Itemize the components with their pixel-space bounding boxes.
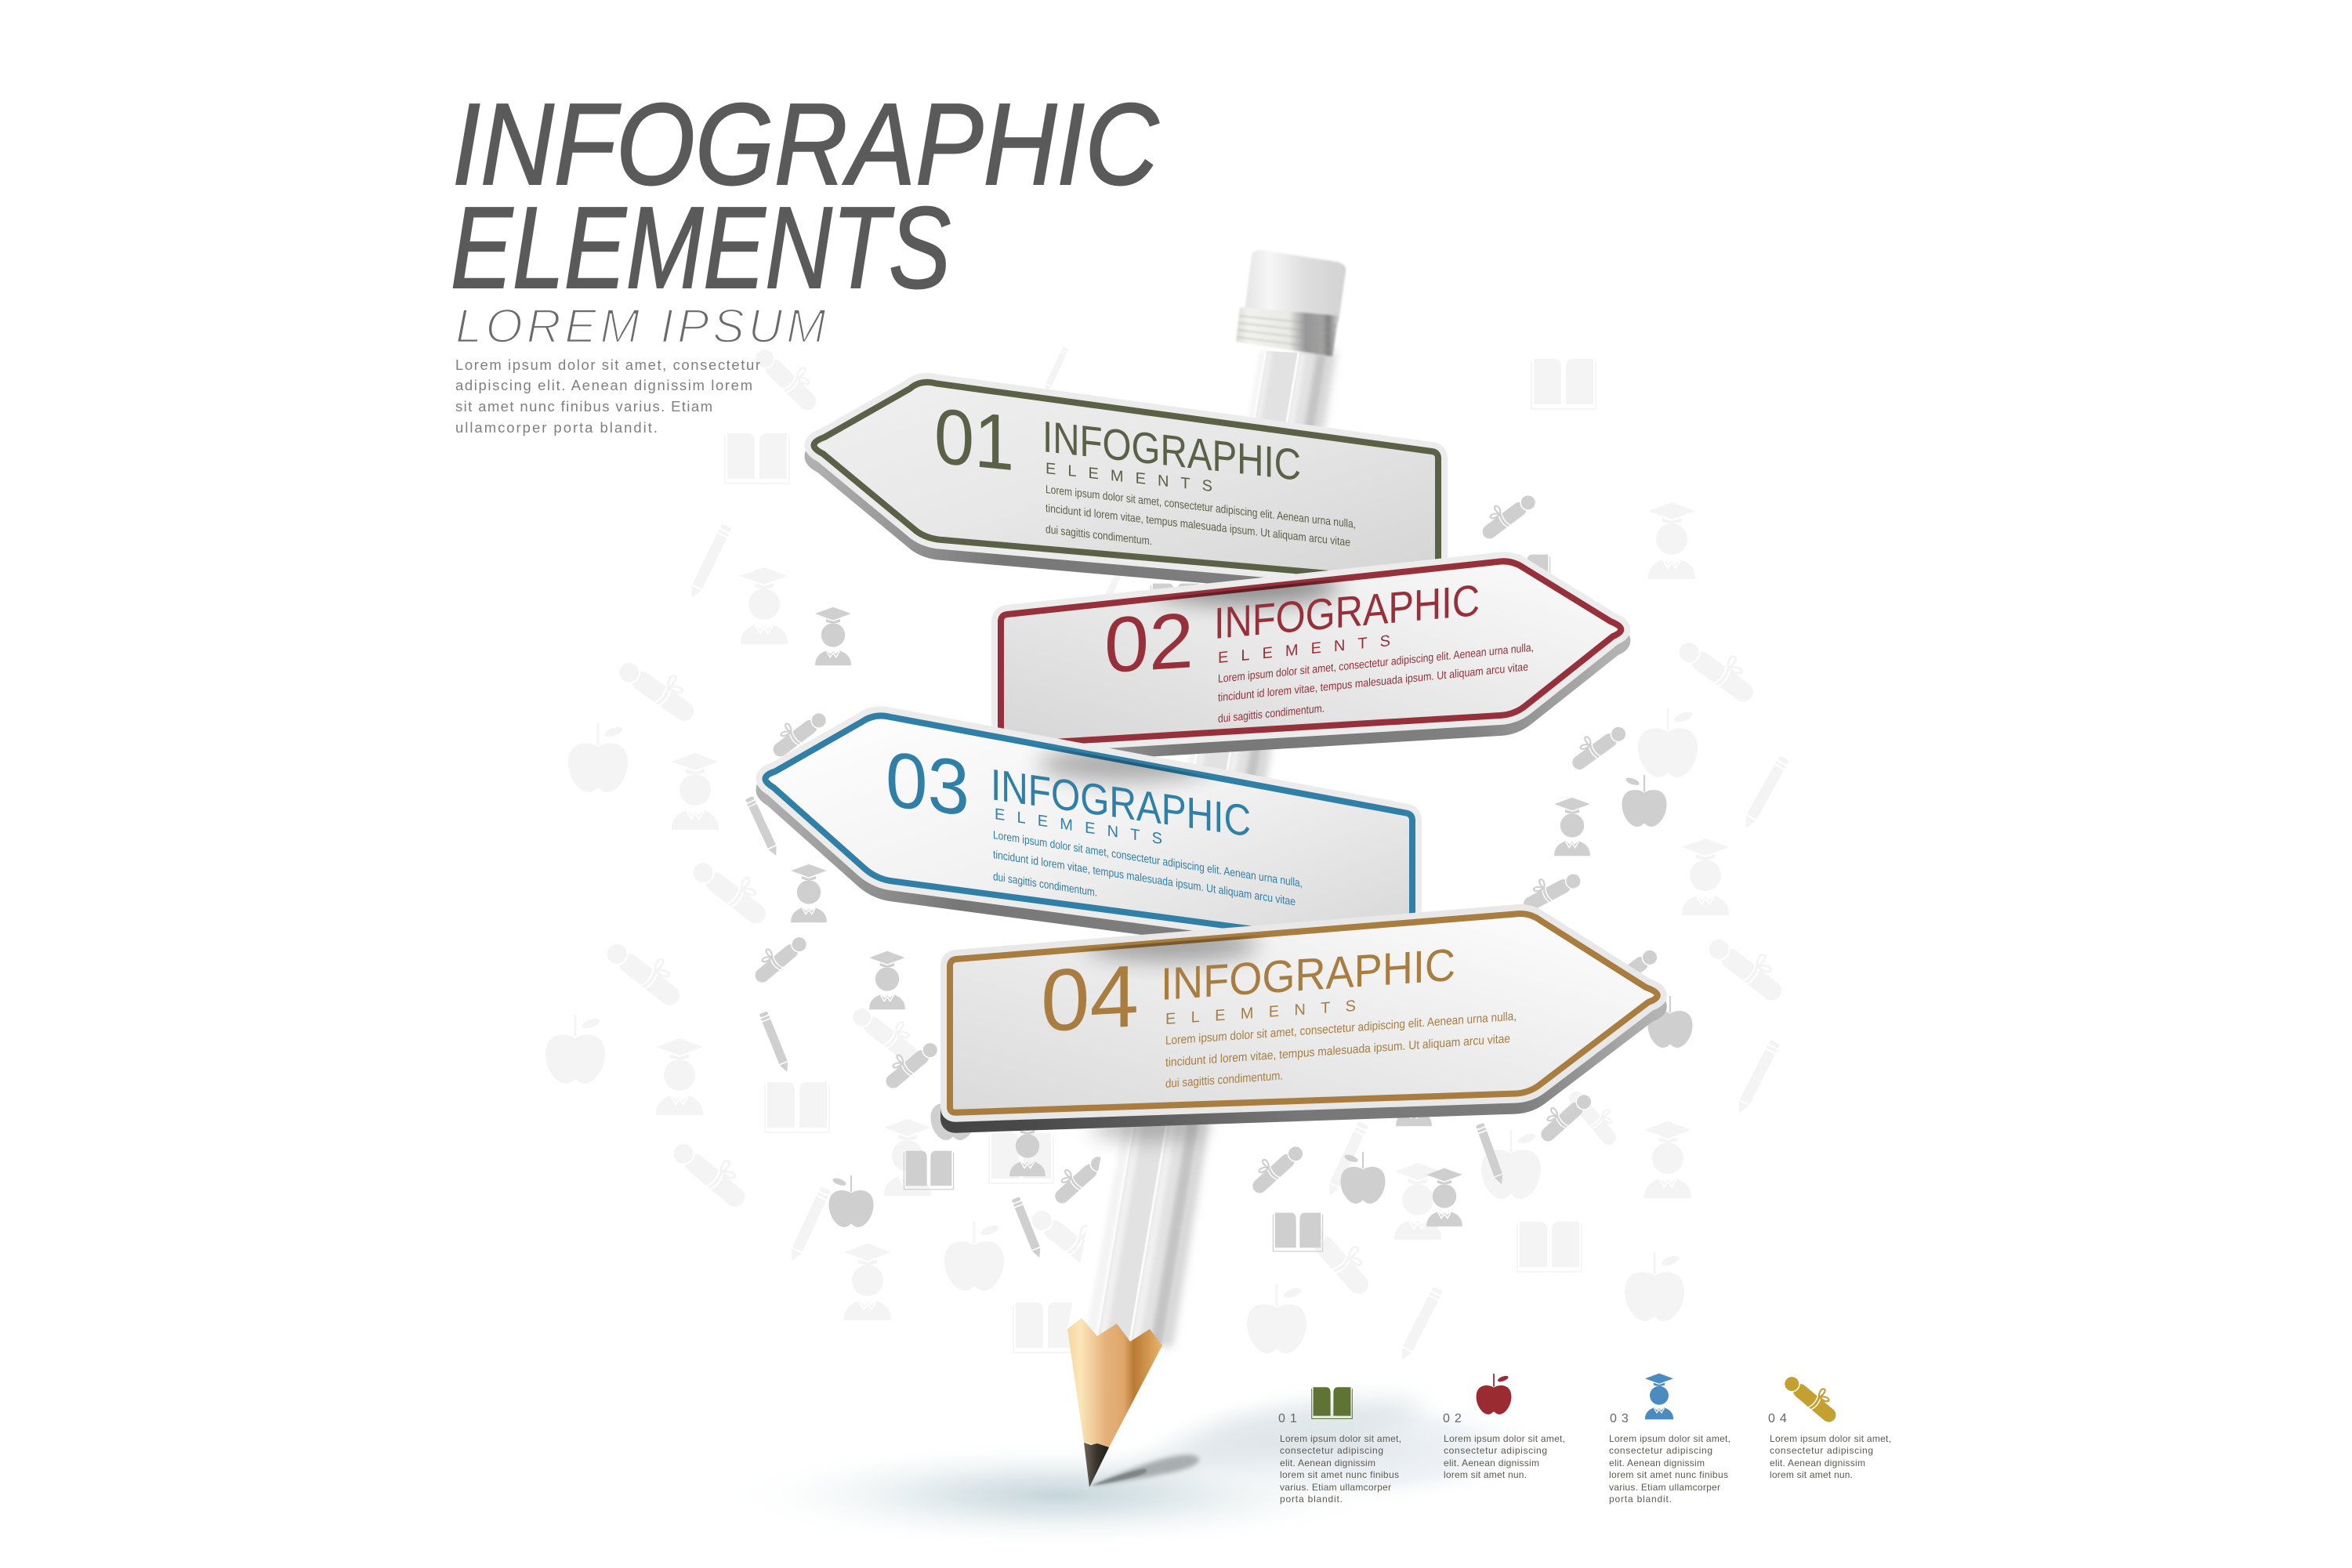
legend item 02: elit. Aenean dignissim	[1444, 1458, 1539, 1468]
legend item 03: Lorem ipsum dolor sit amet,	[1609, 1433, 1730, 1444]
pencil body	[1067, 349, 1335, 1348]
sign 3 subheading: ELEMENTS	[995, 806, 1162, 848]
legend item 02: consectetur adipiscing	[1444, 1445, 1547, 1456]
legend item 02: 02	[1443, 1412, 1466, 1425]
pencil wood tip	[1067, 1318, 1162, 1447]
legend item 01: varius. Etiam ullamcorper	[1280, 1482, 1391, 1493]
sign 4 body text: Lorem ipsum dolor sit amet, consectetur adipiscing elit. Aenean urna nulla,	[1165, 1010, 1517, 1048]
sign 2 heading: INFOGRAPHIC	[1214, 575, 1480, 648]
legend item 04: consectetur adipiscing	[1770, 1445, 1873, 1456]
legend item 02: Lorem ipsum dolor sit amet,	[1444, 1433, 1565, 1444]
sign 4 heading: INFOGRAPHIC	[1161, 940, 1455, 1010]
sign 2 number: 02	[1104, 596, 1194, 690]
subtitle: LOREM IPSUM	[455, 299, 826, 353]
sign 3 heading: INFOGRAPHIC	[991, 759, 1251, 846]
legend item 03	[1609, 1374, 1730, 1505]
sign 1 body text: Lorem ipsum dolor sit amet, consectetur adipiscing elit. Aenean urna nulla,	[1046, 483, 1356, 531]
intro paragraph: ullamcorper porta blandit.	[455, 419, 658, 436]
sign 3: blue arrow	[765, 715, 1412, 961]
sign 1 number: 01	[934, 392, 1014, 487]
legend item 02	[1443, 1374, 1565, 1480]
intro paragraph: adipiscing elit. Aenean dignissim lorem	[455, 377, 752, 393]
pencil	[1067, 250, 1346, 1487]
title: ELEMENTS	[451, 183, 951, 313]
sign 1 body text: dui sagittis condimentum.	[1046, 523, 1152, 548]
legend item 03: 03	[1610, 1412, 1633, 1425]
legend item 01: elit. Aenean dignissim	[1280, 1458, 1375, 1468]
legend item 03: lorem sit amet nunc finibus	[1609, 1469, 1728, 1480]
sign 3 body text: Lorem ipsum dolor sit amet, consectetur adipiscing elit. Aenean urna nulla,	[993, 829, 1303, 890]
sign 4 body text: tincidunt id lorem vitae, tempus malesuada ipsum. Ut aliquam arcu vitae	[1165, 1032, 1510, 1070]
legend item 04: 04	[1768, 1412, 1792, 1425]
sign 4 subheading: ELEMENTS	[1165, 998, 1356, 1028]
sign 3 body text: dui sagittis condimentum.	[993, 871, 1097, 900]
pencil eraser	[1245, 250, 1346, 321]
legend	[1278, 1366, 1891, 1505]
legend item 01: Lorem ipsum dolor sit amet,	[1280, 1433, 1401, 1444]
legend item 01: porta blandit.	[1280, 1494, 1343, 1505]
legend item 03: porta blandit.	[1609, 1494, 1672, 1505]
soft shadow under sign 4 on pencil	[1092, 1114, 1205, 1139]
sign 2 body text: Lorem ipsum dolor sit amet, consectetur adipiscing elit. Aenean urna nulla,	[1218, 642, 1534, 686]
legend item 01: 01	[1278, 1412, 1302, 1425]
legend item 03: elit. Aenean dignissim	[1609, 1458, 1705, 1468]
sign 3 body text: tincidunt id lorem vitae, tempus malesuada ipsum. Ut aliquam arcu vitae	[993, 849, 1296, 909]
background icon pattern	[545, 337, 1794, 1363]
legend item 04	[1768, 1366, 1891, 1480]
sign 4 body text	[1165, 1010, 1517, 1091]
intro paragraph: sit amet nunc finibus varius. Etiam	[455, 398, 712, 415]
sign 4 number: 04	[1041, 947, 1139, 1050]
sign 1 heading: INFOGRAPHIC	[1042, 411, 1301, 490]
legend item 01: lorem sit amet nunc finibus	[1280, 1469, 1399, 1480]
sign 3 number: 03	[886, 735, 969, 833]
legend item 02: lorem sit amet nun.	[1444, 1469, 1527, 1480]
legend item 01	[1278, 1387, 1401, 1505]
legend item 01: consectetur adipiscing	[1280, 1445, 1383, 1456]
title	[451, 80, 1159, 313]
title: INFOGRAPHIC	[452, 80, 1159, 209]
intro paragraph	[455, 357, 760, 436]
sign 2: red arrow	[1001, 561, 1621, 756]
sign 2 subheading: ELEMENTS	[1218, 632, 1390, 667]
sign 1 body text: tincidunt id lorem vitae, tempus malesuada ipsum. Ut aliquam arcu vitae	[1046, 502, 1350, 549]
ground shadow	[721, 1392, 1560, 1550]
sign 2 body text: dui sagittis condimentum.	[1218, 702, 1325, 726]
pencil lead	[1084, 1443, 1109, 1487]
sign 2 body text	[1218, 642, 1534, 726]
sign 4 body text: dui sagittis condimentum.	[1165, 1070, 1283, 1091]
intro paragraph: Lorem ipsum dolor sit amet, consectetur	[455, 357, 760, 373]
legend item 04: lorem sit amet nun.	[1770, 1469, 1853, 1480]
sign 1 subheading: ELEMENTS	[1046, 460, 1212, 495]
legend item 03: consectetur adipiscing	[1609, 1445, 1712, 1456]
legend item 04: elit. Aenean dignissim	[1770, 1458, 1865, 1468]
sign 1: olive arrow	[814, 382, 1438, 594]
legend item 03: varius. Etiam ullamcorper	[1609, 1482, 1720, 1493]
pencil ferrule	[1236, 307, 1339, 357]
sign 2 body text: tincidunt id lorem vitae, tempus malesuada ipsum. Ut aliquam arcu vitae	[1218, 661, 1528, 704]
legend item 04: Lorem ipsum dolor sit amet,	[1770, 1433, 1891, 1444]
sign 4: gold arrow	[950, 914, 1658, 1124]
